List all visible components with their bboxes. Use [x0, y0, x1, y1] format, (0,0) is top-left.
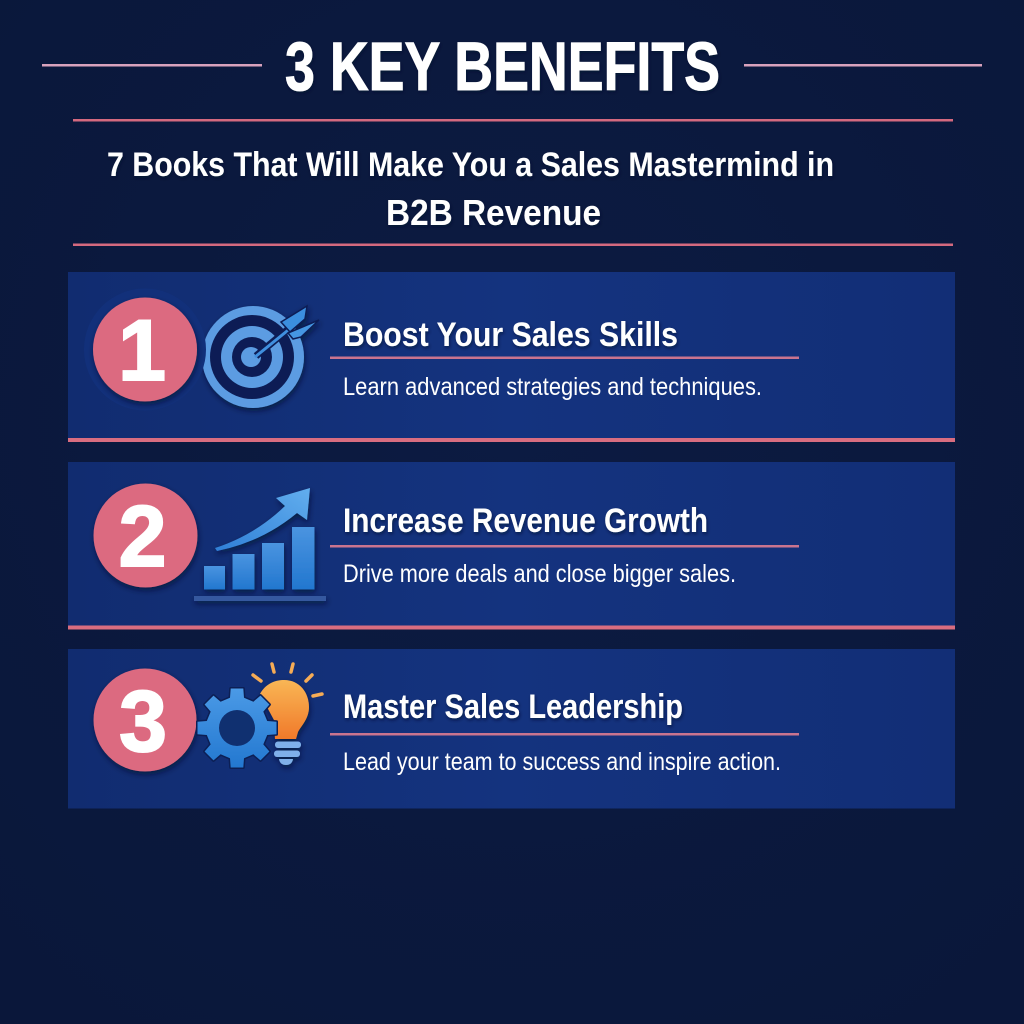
- light bulb: [260, 680, 309, 765]
- panel: increase revenue growth: [68, 462, 955, 630]
- icon: gear and light bulb: [198, 664, 322, 768]
- panel: boost your sales skills: [68, 272, 955, 442]
- icon: bar chart with rising arrow: [194, 488, 326, 601]
- subtitle: 7 Books That Will Make You a Sales Mastermind in: [107, 146, 834, 184]
- badge: number 1: 1: [118, 303, 166, 399]
- description: Drive more deals and close bigger sales.: [343, 560, 736, 588]
- description: Learn advanced strategies and techniques.: [343, 373, 762, 401]
- subtitle: B2B Revenue: [386, 192, 601, 233]
- heading: Boost Your Sales Skills: [343, 316, 678, 354]
- badge: number 3: 3: [119, 674, 167, 770]
- divider rule: [330, 733, 799, 736]
- panel: master sales leadership: [68, 649, 955, 808]
- heading: Master Sales Leadership: [343, 688, 683, 726]
- badge: number 1: [84, 288, 206, 410]
- icon: target with arrow: [202, 306, 319, 408]
- badge: number 2: 2: [119, 489, 166, 585]
- heading: Increase Revenue Growth: [343, 502, 708, 540]
- divider rule: [330, 356, 799, 359]
- description: Lead your team to success and inspire action.: [343, 748, 781, 776]
- badge: number 3: [94, 668, 196, 772]
- subtitle: [73, 119, 953, 246]
- light rays: [253, 664, 322, 696]
- badge: number 2: [94, 484, 198, 588]
- gear: [198, 688, 276, 768]
- title: 3 KEY BENEFITS: [285, 28, 720, 105]
- divider rule: [330, 545, 799, 548]
